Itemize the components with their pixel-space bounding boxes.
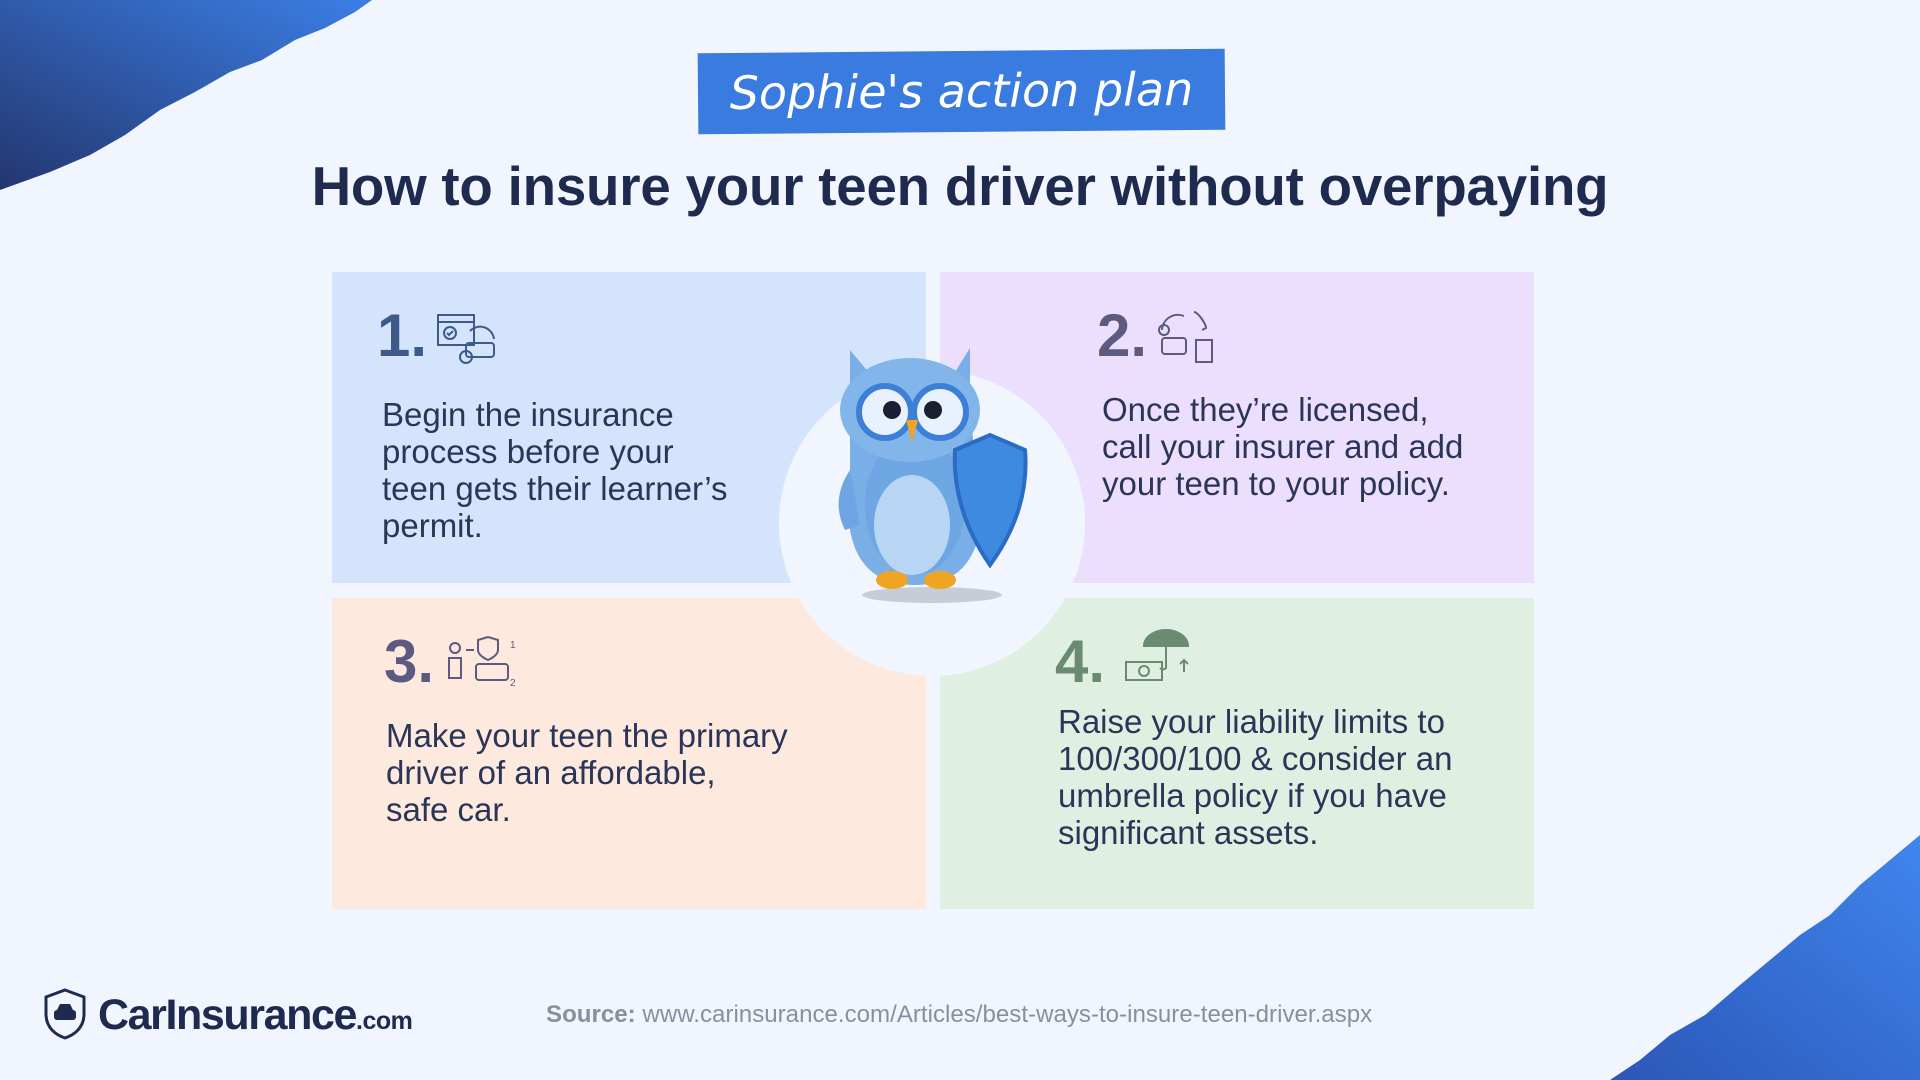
number 4: 4. bbox=[1055, 628, 1105, 695]
decoration: bottom-right corner bbox=[1610, 835, 1920, 1080]
text 4: 100/300/100 & consider an bbox=[1058, 740, 1452, 777]
icon: driver car: 1 bbox=[510, 640, 516, 651]
panel 1 bbox=[332, 272, 926, 583]
banner: Sophie's action plan: Sophie's action plan bbox=[729, 62, 1194, 120]
text 4 bbox=[1058, 703, 1452, 851]
text 3 bbox=[386, 717, 788, 828]
icon: driver car bbox=[448, 636, 516, 689]
number 1: 1. bbox=[377, 302, 427, 369]
text 3: driver of an affordable, bbox=[386, 754, 716, 791]
text 3: safe car. bbox=[386, 791, 511, 828]
owl mascot bbox=[838, 348, 1028, 603]
panel 2 bbox=[940, 272, 1534, 583]
text 1: teen gets their learner’s bbox=[382, 470, 728, 507]
number 2: 2. bbox=[1097, 302, 1147, 369]
text 2: your teen to your policy. bbox=[1102, 465, 1450, 502]
text 4: significant assets. bbox=[1058, 814, 1318, 851]
number 3: 3. bbox=[384, 628, 434, 695]
banner: Sophie's action plan bbox=[698, 49, 1225, 134]
circle behind owl bbox=[779, 370, 1085, 676]
decoration: top-left corner bbox=[0, 0, 372, 190]
text 1: process before your bbox=[382, 433, 674, 470]
source: Source: www.carinsurance.com/Articles/best-ways-to-insure-teen-driver.aspx bbox=[546, 1001, 1372, 1028]
panel 4 bbox=[940, 598, 1534, 909]
text 2 bbox=[1102, 391, 1463, 502]
text 4: Raise your liability limits to bbox=[1058, 703, 1445, 740]
icon: driver car: 2 bbox=[510, 678, 516, 689]
icon: shield car bbox=[44, 988, 86, 1040]
text 1: Begin the insurance bbox=[382, 396, 674, 433]
logo: CarInsurance.com: CarInsurance.com bbox=[98, 991, 412, 1039]
text 2: Once they’re licensed, bbox=[1102, 391, 1429, 428]
title: How to insure your teen driver without overpaying bbox=[312, 155, 1608, 217]
text 3: Make your teen the primary bbox=[386, 717, 788, 754]
text 2: call your insurer and add bbox=[1102, 428, 1463, 465]
icon: calendar car bbox=[437, 314, 495, 364]
icon: car phone bbox=[1158, 311, 1213, 363]
text 1: permit. bbox=[382, 507, 483, 544]
text 4: umbrella policy if you have bbox=[1058, 777, 1447, 814]
icon: umbrella money bbox=[1125, 629, 1189, 681]
text 1 bbox=[382, 396, 728, 544]
panel 3 bbox=[332, 598, 926, 909]
